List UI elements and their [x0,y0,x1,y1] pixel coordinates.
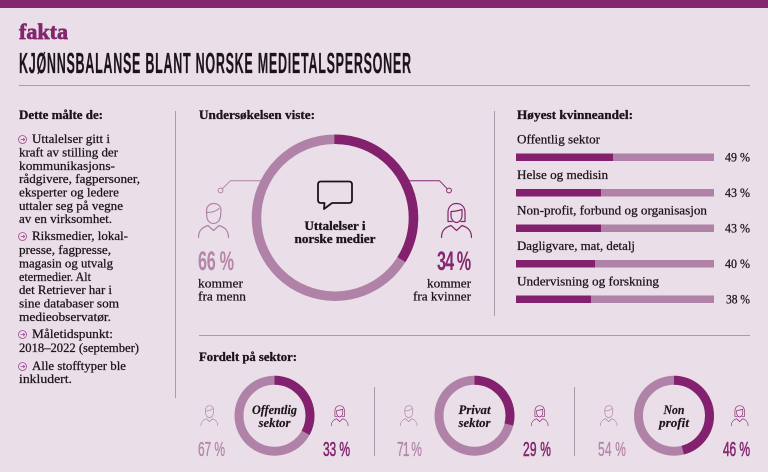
sector: Non profit [598,380,750,461]
sector: Non profit: Non [663,403,685,417]
sector: Privat sektor: sektor [457,416,491,430]
bullet 2: presse, fagpresse, [19,243,111,257]
bar: Undervisning 38 %: Undervisning og forskning [517,274,660,288]
stat: 66 % men: 66 % [198,246,234,276]
sector: Offentlig sektor: 67 % [198,439,225,461]
sector: Offentlig sektor [198,380,350,461]
bullet 4: Alle stofftyper ble [32,359,126,373]
stat: 34 % women [413,246,472,304]
bar: Dagligvare 40 %: 40 % [725,257,750,271]
donut centre label: Uttalelser i [304,219,366,233]
bar: Offentlig sektor 49 %: Offentlig sektor [517,132,601,146]
stat: 34 % women: fra kvinner [413,290,472,304]
bar: Dagligvare 40 %: Dagligvare, mat, detalj [517,239,635,253]
icon: speech bubble [318,182,352,209]
bullet 3 [18,327,139,355]
sector: Non profit: 54 % [598,439,626,461]
sector: Non profit: profit [658,416,690,430]
bullet 1: kommunikasjons- [19,159,115,173]
heading: Dette målte de: Dette målte de: [19,108,103,122]
bar: Helse og medisin 43 %: Helse og medisin [517,168,609,182]
bullet 2: medieobservatør. [19,310,111,324]
heading: Høyest kvinneandel: Høyest kvinneandel: [517,108,633,122]
stat: 66 % men: kommer [198,276,244,290]
bar: Helse og medisin 43 % [516,168,750,200]
bullet 1: uttaler seg på vegne [19,199,123,213]
donut centre label [294,219,376,246]
donut centre label: norske medier [294,232,376,246]
bullet 1: kraft av stilling der [19,146,119,160]
sector: Offentlig sektor: 33 % [323,439,350,461]
sector: Privat sektor [397,380,551,461]
connector: men [218,181,261,193]
bullet 1: eksperter og ledere [19,186,119,200]
stat: 34 % women: 34 % [437,246,471,276]
sector: Offentlig sektor: sektor [257,416,291,430]
top bar [0,0,768,8]
icon: man [198,204,228,238]
bar: Non-profit 43 %: 43 % [725,222,750,236]
bullet 4: inkludert. [19,372,72,386]
sector: Non profit: 46 % [723,439,750,461]
stat: 66 % men [198,246,247,304]
kicker: fakta: fakta [19,19,68,44]
bullet 2: etermedier. Alt [19,270,92,284]
donut chart: 34 % women, 66 % men [256,139,414,296]
icon: woman [442,204,472,238]
stat: 34 % women: kommer [427,276,472,290]
sector: Offentlig sektor: Offentlig [252,403,297,417]
bullet 1 [18,132,140,226]
panel: Dette målte de [18,108,140,386]
bullet 3: 2018–2022 (september) [19,341,139,355]
bar: Non-profit 43 %: Non-profit, forbund og organisasjon [517,204,708,218]
bar: Non-profit 43 % [516,204,750,236]
bullet 3: Måletidspunkt: [32,327,113,341]
panel: Fordelt på sektor [198,350,750,461]
sector: Privat sektor: Privat [458,403,491,417]
bullet 2: det Retriever har i [19,283,113,297]
bar: Dagligvare 40 % [516,239,750,271]
stat: 66 % men: fra menn [198,290,247,304]
bullet 4 [18,359,126,386]
bar: Helse og medisin 43 %: 43 % [725,186,750,200]
panel: Undersøkelsen viste [198,108,472,304]
title: KJØNNSBALANSE BLANT NORSKE MEDIETALSPERSONER [19,47,411,79]
heading: Undersøkelsen viste: Undersøkelsen viste: [199,108,315,122]
bullet 1: Uttalelser gitt i [32,132,111,146]
bullet 2 [18,229,128,324]
bar: Offentlig sektor 49 % [516,132,750,164]
bar: Undervisning 38 % [516,274,750,306]
connector: women [409,181,451,193]
bullet 1: rådgivere, fagpersoner, [19,172,140,186]
bar: Offentlig sektor 49 %: 49 % [725,150,750,164]
sector: Privat sektor: 29 % [523,439,551,461]
bar: Undervisning 38 %: 38 % [726,292,750,306]
bullet 2: sine databaser som [19,296,119,310]
heading: Fordelt på sektor: Fordelt på sektor: [199,350,297,364]
bullet 2: Riksmedier, lokal- [32,229,128,243]
bullet 1: av en virksomhet. [19,212,112,226]
bullet 2: magasin og utvalg [19,256,114,270]
panel: Høyest kvinneandel [516,108,750,306]
sector: Privat sektor: 71 % [397,439,422,461]
